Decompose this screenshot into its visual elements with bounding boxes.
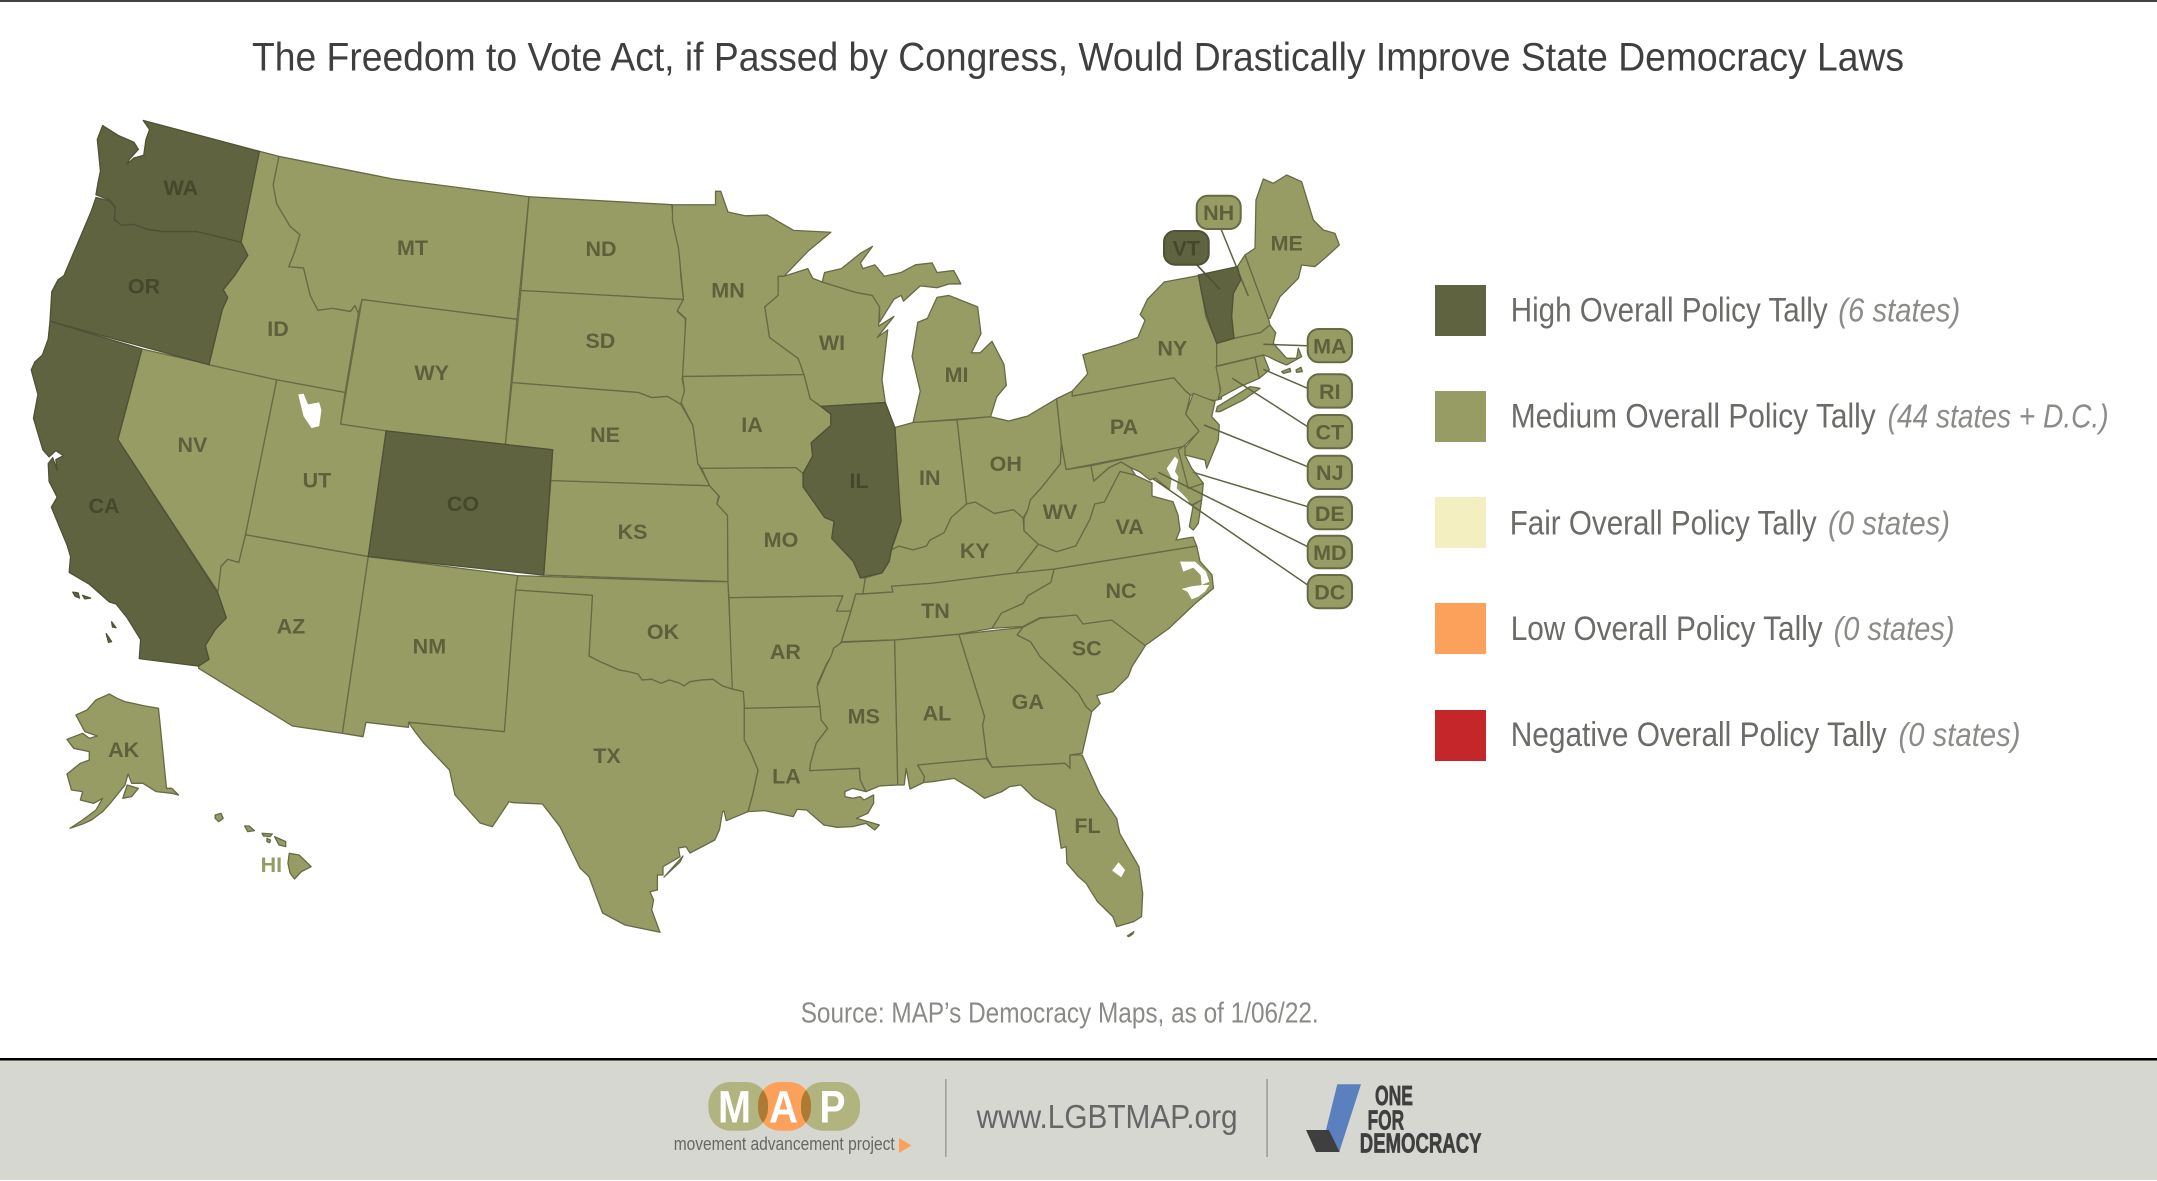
state: Mississippi bbox=[810, 640, 898, 792]
logo: MAP: A bbox=[769, 1082, 798, 1133]
logo: One for Democracy: ONE bbox=[1375, 1080, 1413, 1111]
state: Oregon bbox=[50, 198, 248, 365]
state abbreviations: ME bbox=[1271, 232, 1303, 256]
callout: MA bbox=[1308, 329, 1352, 362]
state abbreviations: MI bbox=[945, 363, 969, 387]
state: Iowa bbox=[681, 375, 831, 473]
callout: DE bbox=[1308, 497, 1352, 529]
state: Minnesota bbox=[672, 191, 831, 377]
callout: DE: DE bbox=[1315, 502, 1345, 526]
state: Maine bbox=[1245, 175, 1339, 318]
state abbreviations: NE bbox=[590, 423, 620, 447]
state: Georgia bbox=[959, 627, 1092, 768]
state: Vermont bbox=[1198, 267, 1241, 343]
island: Lanai bbox=[267, 838, 271, 843]
footer band bbox=[0, 1058, 2157, 1180]
state abbreviations: WV bbox=[1043, 500, 1078, 524]
state: North Dakota bbox=[521, 197, 683, 300]
state: Montana bbox=[273, 156, 529, 319]
leader line: VT bbox=[1197, 265, 1220, 289]
lake: Okeechobee bbox=[1112, 862, 1125, 877]
callout: NH bbox=[1197, 196, 1241, 229]
legend: negative: (0 states) bbox=[1898, 716, 2020, 753]
state abbreviations: PA bbox=[1110, 415, 1138, 439]
state abbreviations: OR bbox=[128, 274, 161, 298]
state: South Carolina bbox=[1017, 615, 1145, 712]
state abbreviations: ND bbox=[585, 237, 617, 261]
callout: RI: RI bbox=[1319, 380, 1341, 404]
state abbreviations: NC bbox=[1105, 579, 1137, 603]
legend: fair bbox=[1435, 497, 1950, 548]
legend: medium: (44 states + D.C.) bbox=[1888, 397, 2109, 434]
high tally states bbox=[31, 120, 1241, 666]
callouts: small northeastern states bbox=[1164, 196, 1352, 608]
logo: MAP bbox=[674, 1082, 912, 1154]
state: Alabama bbox=[895, 634, 987, 789]
state abbreviations: MT bbox=[397, 236, 428, 260]
state abbreviations: OH bbox=[990, 452, 1022, 476]
state: Oklahoma bbox=[516, 576, 733, 689]
state abbreviations: ID bbox=[267, 317, 289, 341]
island: Long Island bbox=[1216, 387, 1260, 412]
state abbreviations: KY bbox=[960, 539, 990, 563]
lake: Great Salt Lake bbox=[298, 394, 321, 428]
state: Tennessee bbox=[841, 569, 1054, 642]
state abbreviations: IA bbox=[741, 413, 763, 437]
state abbreviations: TN bbox=[921, 599, 950, 623]
state: Massachusetts bbox=[1217, 325, 1302, 366]
state: Pennsylvania bbox=[1057, 378, 1199, 470]
legend: high: High Overall Policy Tally bbox=[1511, 292, 1828, 330]
callout: NJ bbox=[1308, 456, 1352, 489]
state: Colorado bbox=[368, 431, 553, 575]
bay: Chesapeake bbox=[1167, 457, 1195, 537]
state abbreviations: NY bbox=[1157, 336, 1187, 360]
state abbreviations: NV bbox=[177, 433, 208, 457]
state abbreviations: IL bbox=[849, 469, 869, 493]
state: Hawaii big island bbox=[288, 853, 311, 879]
state abbreviations: MN bbox=[711, 278, 745, 302]
source note: Source: MAP’s Democracy Maps, as of 1/06/22. bbox=[801, 998, 1319, 1030]
state: Indiana bbox=[892, 420, 967, 550]
New England medium states bbox=[1216, 175, 1339, 412]
callout: MA: MA bbox=[1313, 334, 1347, 358]
island: Kauai bbox=[215, 813, 223, 822]
island: Nantucket bbox=[1296, 367, 1302, 372]
state: Michigan lower peninsula bbox=[912, 295, 1006, 422]
state: Nebraska bbox=[505, 383, 710, 486]
title: The Freedom to Vote Act, if Passed by Congress, Would Drastically Improve State Democracy Laws bbox=[252, 36, 1904, 80]
state abbreviations: NM bbox=[413, 634, 446, 658]
state: Michigan upper peninsula bbox=[822, 246, 961, 322]
state abbreviations: SC bbox=[1072, 636, 1102, 660]
state: Washington bbox=[96, 120, 259, 242]
island: Florida Keys bbox=[1127, 932, 1134, 937]
callout: NH: NH bbox=[1203, 201, 1234, 225]
callout: NJ: NJ bbox=[1316, 461, 1344, 485]
callout: DC bbox=[1308, 575, 1352, 608]
island: Kodiak bbox=[123, 785, 138, 798]
website: www.LGBTMAP.org bbox=[976, 1098, 1238, 1135]
state abbreviations: MO bbox=[764, 528, 798, 552]
state: Ohio bbox=[957, 399, 1061, 518]
legend: high bbox=[1435, 285, 1960, 336]
legend: medium: Medium Overall Policy Tally bbox=[1511, 397, 1876, 435]
state abbreviations: WY bbox=[414, 361, 449, 385]
logo: One for Democracy bbox=[1306, 1080, 1482, 1158]
logo: MAP: P bbox=[820, 1082, 846, 1133]
southern medium states bbox=[744, 615, 1145, 937]
legend: fair: Fair Overall Policy Tally bbox=[1510, 504, 1817, 542]
state: Wisconsin bbox=[765, 269, 894, 406]
state: Nevada bbox=[118, 349, 277, 593]
state: Kansas bbox=[544, 481, 728, 581]
state: Missouri bbox=[702, 468, 865, 611]
state abbreviations: CO bbox=[447, 492, 479, 516]
state: Wyoming bbox=[341, 300, 517, 445]
state abbreviations: SD bbox=[585, 329, 615, 353]
sounds: North Carolina coast bbox=[1180, 562, 1209, 599]
state abbreviations: CA bbox=[88, 494, 120, 518]
state abbreviations: AL bbox=[923, 702, 951, 726]
state abbreviations: WA bbox=[163, 176, 198, 200]
callout: MD: MD bbox=[1313, 541, 1347, 565]
logo: MAP: movement advancement project bbox=[674, 1134, 895, 1154]
state: New Jersey bbox=[1183, 393, 1219, 468]
legend: low: Low Overall Policy Tally bbox=[1511, 610, 1823, 648]
logo: MAP: M bbox=[718, 1082, 751, 1133]
southwest medium states bbox=[199, 535, 758, 932]
state: North Carolina bbox=[992, 546, 1213, 646]
state: Illinois bbox=[803, 403, 901, 578]
legend: negative: Negative Overall Policy Tally bbox=[1511, 716, 1887, 754]
state: Maryland bbox=[1091, 447, 1203, 505]
Delaware and eastern shore bbox=[1178, 445, 1203, 530]
Great Lakes and central medium states bbox=[672, 191, 1222, 709]
island: Molokai bbox=[262, 833, 272, 837]
callout: DC: DC bbox=[1314, 580, 1345, 604]
callout: RI bbox=[1308, 374, 1352, 408]
state abbreviations: KS bbox=[618, 520, 647, 544]
state abbreviations bbox=[88, 176, 1303, 877]
state abbreviations: VA bbox=[1116, 515, 1144, 539]
state abbreviations: AZ bbox=[277, 614, 305, 638]
state abbreviations: IN bbox=[919, 466, 941, 490]
state abbreviations: LA bbox=[772, 764, 801, 788]
state: Kentucky bbox=[863, 502, 1038, 594]
island: Channel Islands bbox=[73, 592, 116, 642]
logo: One for Democracy: DEMOCRACY bbox=[1360, 1127, 1482, 1158]
callout: CT: CT bbox=[1315, 420, 1344, 444]
island: Oahu bbox=[245, 826, 254, 832]
state: West Virginia bbox=[1024, 443, 1135, 552]
state abbreviations: UT bbox=[303, 468, 331, 492]
Atlantic medium states bbox=[1016, 393, 1219, 573]
state: Idaho bbox=[209, 151, 358, 392]
state: Florida bbox=[918, 755, 1143, 927]
state: New Mexico bbox=[342, 557, 518, 737]
state: South Dakota bbox=[512, 290, 686, 404]
western medium states bbox=[118, 151, 728, 593]
state abbreviations: WI bbox=[819, 331, 845, 355]
state: Delaware bbox=[1178, 445, 1203, 488]
legend: low: (0 states) bbox=[1834, 610, 1955, 647]
callout: VT bbox=[1164, 231, 1209, 265]
island: Matagorda bbox=[664, 856, 683, 877]
state: New Hampshire bbox=[1232, 255, 1270, 338]
map: United States by overall policy tally bbox=[31, 120, 1352, 937]
legend: negative bbox=[1435, 710, 2020, 761]
state: Texas bbox=[408, 590, 758, 932]
state: Arizona bbox=[199, 535, 368, 733]
state abbreviations: AK bbox=[108, 738, 140, 762]
state abbreviations: GA bbox=[1012, 690, 1044, 714]
state: New York bbox=[1072, 276, 1222, 401]
state abbreviations: TX bbox=[593, 744, 621, 768]
state: Virginia eastern shore bbox=[1189, 500, 1202, 530]
island: Maui bbox=[275, 837, 286, 847]
callout: CT bbox=[1308, 415, 1352, 448]
state: California bbox=[31, 321, 226, 666]
legend: medium bbox=[1435, 391, 2109, 442]
logo: One for Democracy: FOR bbox=[1368, 1104, 1404, 1135]
legend: fair: (0 states) bbox=[1828, 504, 1950, 541]
state: Rhode Island bbox=[1255, 355, 1269, 378]
state abbreviations: OK bbox=[647, 620, 680, 644]
Alaska and Hawaii bbox=[67, 694, 311, 879]
state abbreviations: AR bbox=[770, 640, 801, 664]
leader lines to callouts bbox=[1153, 229, 1308, 585]
legend: low bbox=[1435, 603, 1955, 654]
state: Connecticut bbox=[1216, 357, 1259, 398]
state: Arkansas bbox=[729, 596, 851, 709]
legend: high: (6 states) bbox=[1838, 292, 1960, 329]
callout: MD bbox=[1308, 536, 1352, 568]
state abbreviations: HI bbox=[261, 853, 282, 877]
state: Utah bbox=[246, 380, 386, 557]
state abbreviations: MS bbox=[848, 704, 880, 728]
state: Virginia bbox=[1016, 472, 1197, 573]
state abbreviations: FL bbox=[1074, 814, 1101, 838]
state: Louisiana bbox=[744, 707, 879, 830]
island: Martha's Vineyard bbox=[1282, 368, 1291, 373]
state: Alaska bbox=[67, 694, 179, 828]
legend bbox=[1435, 285, 2109, 761]
callout: VT: VT bbox=[1173, 236, 1200, 260]
